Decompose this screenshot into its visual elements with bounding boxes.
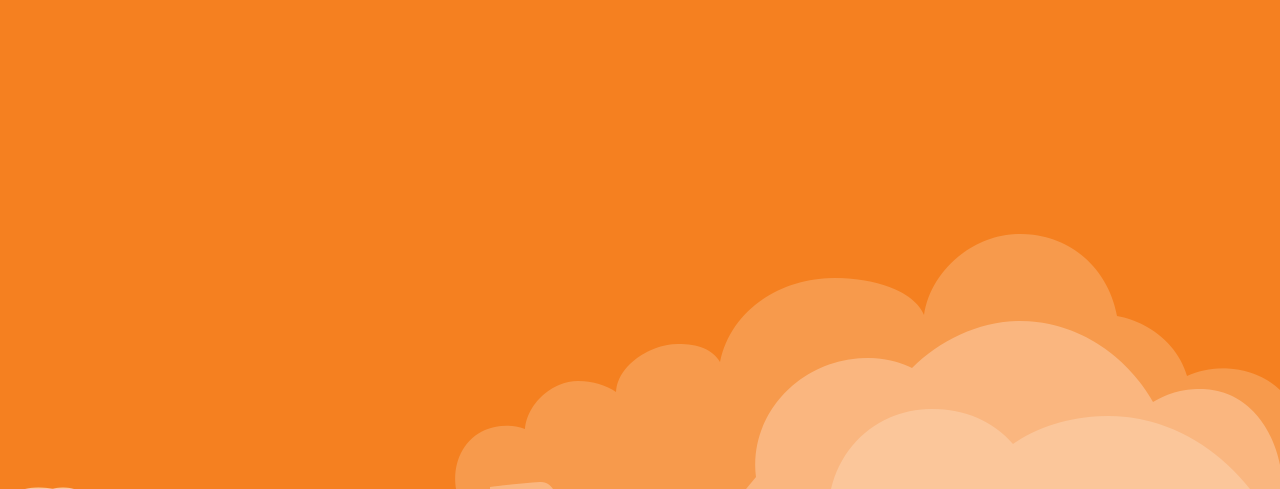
back cloud [455, 234, 1280, 489]
small cloud fragment [490, 482, 553, 489]
left cloud tips [25, 488, 74, 489]
left tip two [52, 488, 74, 489]
left tip one [25, 488, 54, 489]
front cloud [831, 409, 1250, 489]
middle cloud [746, 321, 1280, 489]
